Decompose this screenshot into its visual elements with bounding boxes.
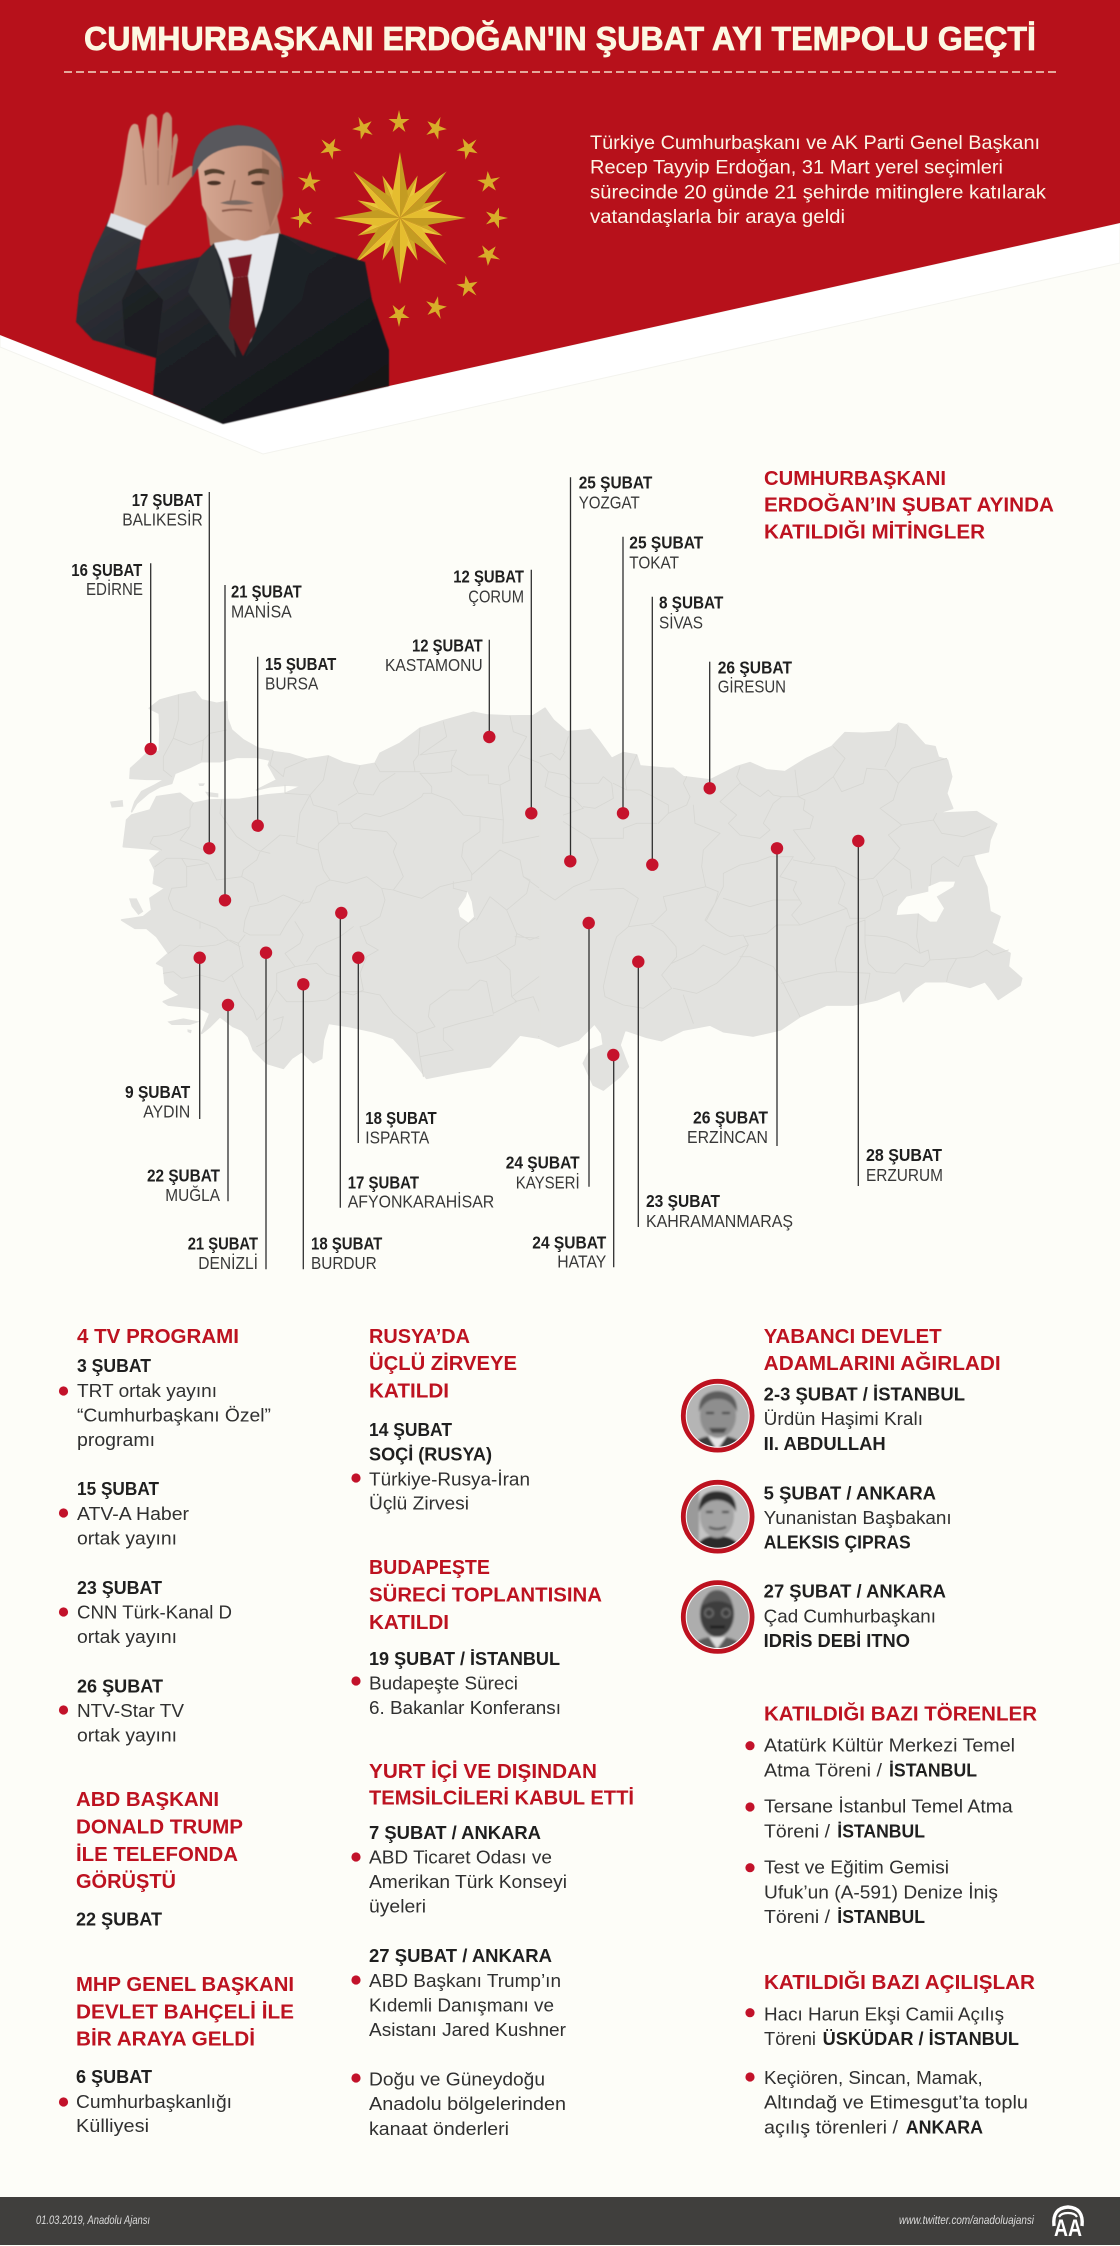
panel: representatives received: üyeleri (369, 1897, 426, 1917)
map pin: Kahramanmaraş: 23 ŞUBAT (646, 1191, 720, 1211)
intro text (590, 133, 1047, 228)
text: İdris Debi Itno: Çad Cumhurbaşkanı (764, 1606, 936, 1626)
panel: openings: Altındağ ve Etimesgut’ta toplu (764, 2093, 1028, 2113)
map pin: Manisa (219, 582, 302, 906)
panel: Trump phone call: DONALD TRUMP (76, 1816, 243, 1838)
map pin: Giresun: 26 ŞUBAT (718, 657, 792, 677)
panel: TV programs: CNN Türk-Kanal D (77, 1603, 232, 1623)
heading: map section: ERDOĞAN’IN ŞUBAT AYINDA (764, 493, 1054, 517)
footer bar (0, 2197, 1120, 2245)
panel: Bahçeli meeting: 6 ŞUBAT (76, 2067, 152, 2087)
panel: TV programs: ortak yayını (77, 1529, 177, 1549)
map pin: Kayseri (506, 917, 595, 1192)
map pin: Hatay (532, 1049, 620, 1272)
panel: Trump phone call (76, 1788, 243, 1930)
map pin: Kastamonu (385, 636, 495, 743)
icon: portrait Aleksis Çipras (680, 1480, 756, 1552)
map pin: Erzincan: ERZİNCAN (687, 1127, 768, 1147)
panel: Russia summit: SOÇİ (RUSYA) (369, 1445, 492, 1465)
icon: presidential emblem (290, 110, 508, 327)
map pin: Denizli: DENİZLİ (198, 1253, 258, 1273)
panel: Trump phone call: ABD BAŞKANI (76, 1788, 219, 1811)
panel: TV programs: ATV-A Haber (77, 1504, 189, 1524)
panel: Russia summit: Üçlü Zirvesi (369, 1494, 469, 1514)
panel: Budapest process: BUDAPEŞTE (369, 1556, 490, 1579)
map pin: Erzurum (852, 835, 943, 1186)
panel: TV programs: “Cumhurbaşkanı Özel” (77, 1406, 271, 1426)
panel: Russia summit: RUSYA’DA (369, 1325, 470, 1348)
map pin: Erzincan: 26 ŞUBAT (693, 1108, 768, 1128)
panel: openings (745, 1970, 1035, 2137)
text: II. Abdullah: 2-3 ŞUBAT / İSTANBUL (764, 1385, 965, 1405)
panel: representatives received: Amerikan Türk Konseyi (369, 1872, 567, 1892)
text: Aleksis Çipras: Yunanistan Başbakanı (764, 1508, 952, 1528)
panel: TV programs: 26 ŞUBAT (77, 1677, 163, 1697)
panel: ceremonies (745, 1702, 1037, 1927)
map pin: Kahramanmaraş (632, 956, 793, 1231)
panel: Budapest process: SÜRECİ TOPLANTISINA (369, 1584, 602, 1607)
heading: foreign statesmen (764, 1325, 1001, 1375)
panel: ceremonies: Töreni / (764, 1907, 830, 1927)
map pin: Afyonkarahisar: 17 ŞUBAT (348, 1172, 419, 1192)
text: İdris Debi Itno: 27 ŞUBAT / ANKARA (764, 1582, 946, 1602)
icon: portrait İdris Debi Itno (680, 1580, 756, 1652)
panel: ceremonies: Atatürk Kültür Merkezi Temel (764, 1736, 1015, 1756)
map pin: Isparta: ISPARTA (365, 1127, 430, 1147)
map pin: Çorum: ÇORUM (468, 586, 524, 606)
map pin: Kastamonu: KASTAMONU (385, 655, 483, 675)
map pin: Kahramanmaraş: KAHRAMANMARAŞ (646, 1211, 793, 1231)
map pin: Burdur: BURDUR (311, 1253, 377, 1273)
panel: representatives received: ABD Ticaret Odası ve (369, 1848, 552, 1868)
panel: Bahçeli meeting: Külliyesi (76, 2116, 149, 2136)
panel: openings: ÜSKÜDAR / İSTANBUL (823, 2029, 1019, 2049)
panel: openings: Hacı Harun Ekşi Camii Açılış (764, 2004, 1004, 2024)
panel: representatives received: YURT İÇİ VE DIŞINDAN (369, 1760, 597, 1783)
text: Aleksis Çipras: ALEKSIS ÇIPRAS (764, 1532, 911, 1552)
panel: Budapest process: Budapeşte Süreci (369, 1674, 518, 1694)
map pin: Giresun (704, 657, 792, 794)
panel: Trump phone call: GÖRÜŞTÜ (76, 1870, 176, 1893)
map pin: Burdur (297, 978, 383, 1273)
text: Aleksis Çipras (764, 1483, 952, 1552)
panel: ceremonies: İSTANBUL (837, 1907, 925, 1927)
panel: Russia summit: KATILDI (369, 1380, 449, 1403)
panel: TV programs: 15 ŞUBAT (77, 1479, 159, 1499)
panel: representatives received: TEMSİLCİLERİ KABUL ETTİ (369, 1787, 634, 1810)
panel: Russia summit: ÜÇLÜ ZİRVEYE (369, 1352, 517, 1375)
map pin: Yozgat: 25 ŞUBAT (579, 473, 653, 493)
map pin: Edirne: 16 ŞUBAT (71, 560, 143, 580)
text: İdris Debi Itno: IDRİS DEBİ ITNO (764, 1631, 910, 1651)
panel: Russia summit (351, 1325, 530, 1514)
map pin: Isparta (352, 952, 437, 1147)
map pin: Denizli: 21 ŞUBAT (188, 1234, 258, 1254)
text: Aleksis Çipras: 5 ŞUBAT / ANKARA (764, 1483, 936, 1503)
map pin: Bursa: BURSA (265, 674, 319, 694)
panel: ceremonies: Atma Töreni / (764, 1761, 882, 1781)
text: II. Abdullah: Ürdün Haşimi Kralı (764, 1409, 923, 1429)
figure: saluting president (76, 112, 389, 424)
map pin: Yozgat (564, 473, 653, 868)
white diagonal band (0, 223, 1120, 454)
panel: representatives received: 27 ŞUBAT / ANKARA (369, 1946, 552, 1966)
map pin: Muğla: 22 ŞUBAT (147, 1165, 220, 1185)
heading: map section: KATILDIĞI MİTİNGLER (764, 520, 985, 544)
title: CUMHURBAŞKANI ERDOĞAN'IN ŞUBAT AYI TEMPOLU GEÇTİ (84, 20, 1036, 57)
panel: ceremonies: Tersane İstanbul Temel Atma (764, 1797, 1014, 1817)
panel: Bahçeli meeting: DEVLET BAHÇELİ İLE (76, 2000, 294, 2024)
map pin: Isparta: 18 ŞUBAT (365, 1108, 437, 1128)
panel: representatives received: Doğu ve Güneydoğu (369, 2070, 545, 2090)
text: II. Abdullah: II. ABDULLAH (764, 1434, 886, 1454)
panel: Bahçeli meeting: MHP GENEL BAŞKANI (76, 1973, 294, 1996)
map pin: Kayseri: KAYSERİ (516, 1172, 580, 1192)
map pin: Muğla (147, 999, 234, 1205)
map pin: Denizli (188, 946, 272, 1273)
icon: AA logo: AA (1054, 2215, 1082, 2242)
panel: ceremonies: İSTANBUL (837, 1821, 925, 1841)
map pin: Balıkesir (122, 490, 216, 854)
map pin: Edirne: EDİRNE (86, 579, 143, 599)
panel: ceremonies: Test ve Eğitim Gemisi (764, 1858, 949, 1878)
panel: Trump phone call: 22 ŞUBAT (76, 1910, 162, 1930)
map pin: Balıkesir: 17 ŞUBAT (132, 490, 203, 510)
panel: TV programs: 4 TV PROGRAMI (77, 1325, 239, 1348)
panel: representatives received: Asistanı Jared Kushner (369, 2020, 566, 2040)
text: II. Abdullah (764, 1385, 965, 1454)
panel: Budapest process: 6. Bakanlar Konferansı (369, 1698, 561, 1718)
panel: representatives received: kanaat önderleri (369, 2119, 509, 2139)
panel: TV programs: programı (77, 1430, 155, 1450)
intro text: vatandaşlarla bir araya geldi (590, 207, 845, 228)
text: İdris Debi Itno (764, 1582, 946, 1651)
panel: ceremonies: İSTANBUL (889, 1761, 977, 1781)
panel: TV programs (59, 1325, 271, 1746)
map pin: Tokat: 25 ŞUBAT (629, 533, 704, 553)
panel: representatives received: Kıdemli Danışmanı ve (369, 1996, 554, 2016)
panel: ceremonies: Töreni / (764, 1821, 830, 1841)
panel: Budapest process: KATILDI (369, 1611, 449, 1634)
map pin: Aydın: 9 ŞUBAT (125, 1082, 191, 1102)
panel: TV programs: TRT ortak yayını (77, 1381, 217, 1401)
map pin: Tokat (617, 533, 704, 820)
panel: Russia summit: Türkiye-Rusya-İran (369, 1469, 530, 1489)
panel: Russia summit: 14 ŞUBAT (369, 1420, 452, 1440)
map pin: Kayseri: 24 ŞUBAT (506, 1153, 580, 1173)
heading: foreign statesmen: ADAMLARINI AĞIRLADI (764, 1351, 1001, 1375)
map pin: Çorum: 12 ŞUBAT (453, 566, 524, 586)
map pin: Burdur: 18 ŞUBAT (311, 1234, 383, 1254)
heading: foreign statesmen: YABANCI DEVLET (764, 1325, 942, 1348)
map of Turkey (110, 692, 1022, 1090)
map pin: Erzincan (687, 842, 783, 1147)
panel: ceremonies: Ufuk’un (A-591) Denize İniş (764, 1882, 998, 1902)
map pin: Afyonkarahisar (335, 907, 494, 1212)
panel: TV programs: ortak yayını (77, 1726, 177, 1746)
panel: openings: KATILDIĞI BAZI AÇILIŞLAR (764, 1970, 1035, 1994)
map pin: Afyonkarahisar: AFYONKARAHİSAR (348, 1192, 494, 1212)
icon: AA logo (1054, 2207, 1082, 2242)
panel: Budapest process (351, 1556, 602, 1718)
map pin: Sivas (646, 592, 724, 871)
panel: Bahçeli meeting: BİR ARAYA GELDİ (76, 2028, 255, 2050)
panel: representatives received: Anadolu bölgelerinden (369, 2094, 566, 2114)
map pin: Sivas: SİVAS (659, 612, 703, 632)
icon: portrait II. Abdullah (680, 1380, 756, 1452)
panel: representatives received (351, 1760, 634, 2139)
map pin: Erzurum: 28 ŞUBAT (866, 1145, 942, 1165)
heading: map section (764, 467, 1054, 544)
panel: ceremonies: KATILDIĞI BAZI TÖRENLER (764, 1702, 1037, 1726)
panel: Budapest process: 19 ŞUBAT / İSTANBUL (369, 1649, 560, 1669)
panel: Bahçeli meeting (59, 1973, 294, 2136)
panel: TV programs: 3 ŞUBAT (77, 1356, 151, 1376)
map pin: Bursa (252, 654, 337, 832)
map pin: Tokat: TOKAT (629, 552, 679, 572)
panel: TV programs: 23 ŞUBAT (77, 1578, 162, 1598)
map pin: Sivas: 8 ŞUBAT (659, 592, 724, 612)
panel: openings: ANKARA (906, 2117, 983, 2137)
map pin: Balıkesir: BALIKESİR (122, 509, 203, 529)
map pin: Hatay: HATAY (557, 1252, 607, 1272)
intro text: Recep Tayyip Erdoğan, 31 Mart yerel seçimleri (590, 158, 1003, 179)
panel: TV programs: NTV-Star TV (77, 1701, 184, 1721)
footer bar: 01.03.2019, Anadolu Ajansı (36, 2215, 150, 2227)
intro text: Türkiye Cumhurbaşkanı ve AK Parti Genel Başkanı (590, 133, 1040, 154)
panel: openings: Keçiören, Sincan, Mamak, (764, 2068, 983, 2088)
map pin: Aydın: AYDIN (143, 1101, 190, 1121)
panel: representatives received: 7 ŞUBAT / ANKARA (369, 1823, 541, 1843)
panel: Bahçeli meeting: Cumhurbaşkanlığı (76, 2092, 232, 2112)
map pin: Hatay: 24 ŞUBAT (532, 1232, 607, 1252)
panel: representatives received: ABD Başkanı Trump’ın (369, 1971, 561, 1991)
panel: openings: açılış törenleri / (764, 2117, 898, 2137)
heading: map section: CUMHURBAŞKANI (764, 467, 946, 490)
red header panel (0, 0, 1120, 423)
map pin: Bursa: 15 ŞUBAT (265, 654, 337, 674)
map pin: Muğla: MUĞLA (165, 1184, 220, 1205)
map pin: Giresun: GİRESUN (718, 677, 786, 697)
map pin: Aydın (125, 952, 206, 1121)
map pin: Manisa: MANİSA (231, 601, 292, 621)
panel: openings: Töreni (764, 2029, 816, 2049)
map pin: Yozgat: YOZGAT (579, 493, 640, 513)
panel: TV programs: ortak yayını (77, 1627, 177, 1647)
intro text: sürecinde 20 günde 21 şehirde mitinglere katılarak (590, 183, 1047, 204)
footer bar: www.twitter.com/anadoluajansi (899, 2215, 1034, 2227)
map pin: Çorum (453, 566, 538, 820)
panel: Trump phone call: İLE TELEFONDA (76, 1843, 238, 1866)
map pin: Erzurum: ERZURUM (866, 1165, 943, 1185)
map pin: Kastamonu: 12 ŞUBAT (412, 636, 483, 656)
map pin: Edirne (71, 560, 157, 755)
map pin: Manisa: 21 ŞUBAT (231, 582, 302, 602)
